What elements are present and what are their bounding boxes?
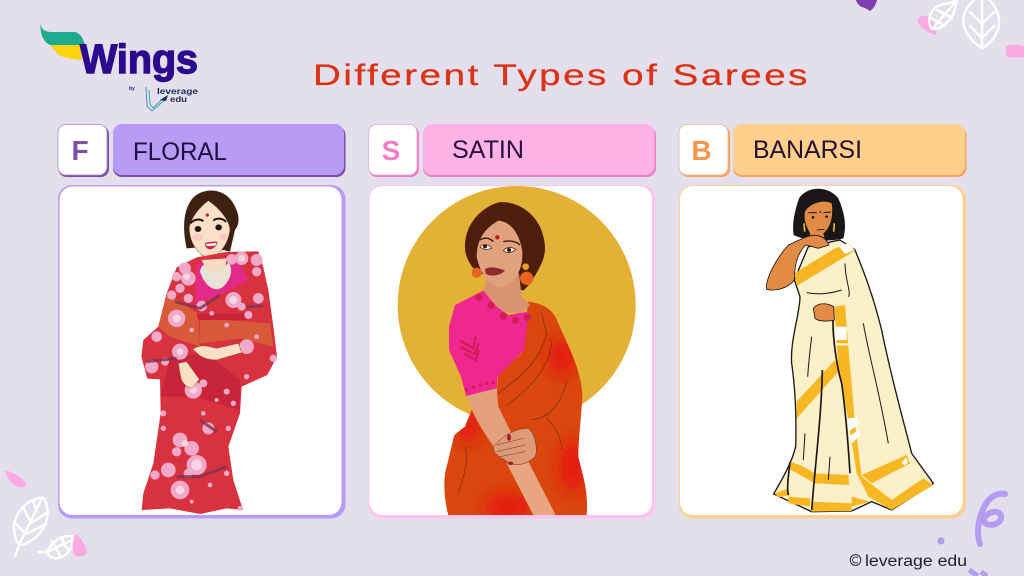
panel: banarsi (679, 124, 966, 518)
heading bar: satin: SATIN (452, 136, 524, 164)
letter tile B: B (691, 135, 712, 166)
letter tile F: F (71, 135, 89, 166)
heading bar: banarsi: BANARSI (753, 136, 862, 164)
card: floral (58, 185, 346, 518)
illustration: woman in floral saree (141, 191, 277, 514)
logo: Wings by leverage edu: edu (170, 94, 187, 104)
blossoms (145, 252, 277, 511)
card: banarsi (679, 185, 966, 518)
earrings (472, 263, 533, 285)
facial features (191, 213, 227, 249)
letter tile B (679, 124, 730, 177)
illustration: woman in cream and gold saree (766, 189, 933, 512)
hair (184, 191, 239, 252)
facial features (804, 211, 834, 232)
logo: Wings by leverage edu: by (129, 86, 135, 92)
outline folds (788, 263, 888, 510)
copyright credit: leverage edu (865, 553, 967, 570)
hand at waist (813, 304, 834, 321)
decoration: top right leaves and petals (856, 0, 1024, 58)
logo: Wings by leverage edu (40, 23, 198, 111)
heading bar: floral: FLORAL (133, 138, 227, 166)
saree body (141, 251, 277, 514)
face (477, 221, 522, 287)
facial features (480, 235, 520, 276)
arm (467, 388, 512, 448)
gold borders (774, 243, 933, 512)
saree colour shading (457, 338, 587, 520)
blossom highlights (173, 255, 245, 494)
letter tile S (368, 124, 419, 177)
title: Different Types of Sarees (313, 59, 810, 92)
face and neck (805, 202, 832, 247)
neck (200, 250, 228, 280)
blouse (449, 291, 528, 396)
neck (483, 273, 530, 313)
hands (193, 343, 242, 360)
white stripes (836, 243, 908, 465)
logo: Wings by leverage edu: Wings (80, 36, 198, 82)
decoration: bottom right squiggle and dot (937, 494, 1005, 576)
heading bar: banarsi (733, 124, 966, 177)
heading bar: satin (423, 124, 656, 177)
logo: Wings by leverage edu: leverage (157, 86, 198, 96)
hair (465, 202, 545, 291)
saree (444, 302, 587, 515)
illustration: woman in red satin saree (398, 186, 636, 520)
letter tile S: S (382, 135, 400, 166)
heading bar: floral (113, 124, 346, 177)
card: satin (368, 185, 656, 518)
saree (774, 240, 933, 512)
arm and hand under chin (766, 235, 829, 290)
panel: satin (368, 124, 656, 520)
choli and necklace (195, 263, 248, 303)
decoration: bottom left leaves and petals (5, 470, 87, 558)
panel: floral (58, 124, 966, 520)
letter tile F (58, 124, 109, 177)
hair (793, 189, 845, 241)
face (189, 201, 230, 258)
dark branches (147, 295, 263, 477)
